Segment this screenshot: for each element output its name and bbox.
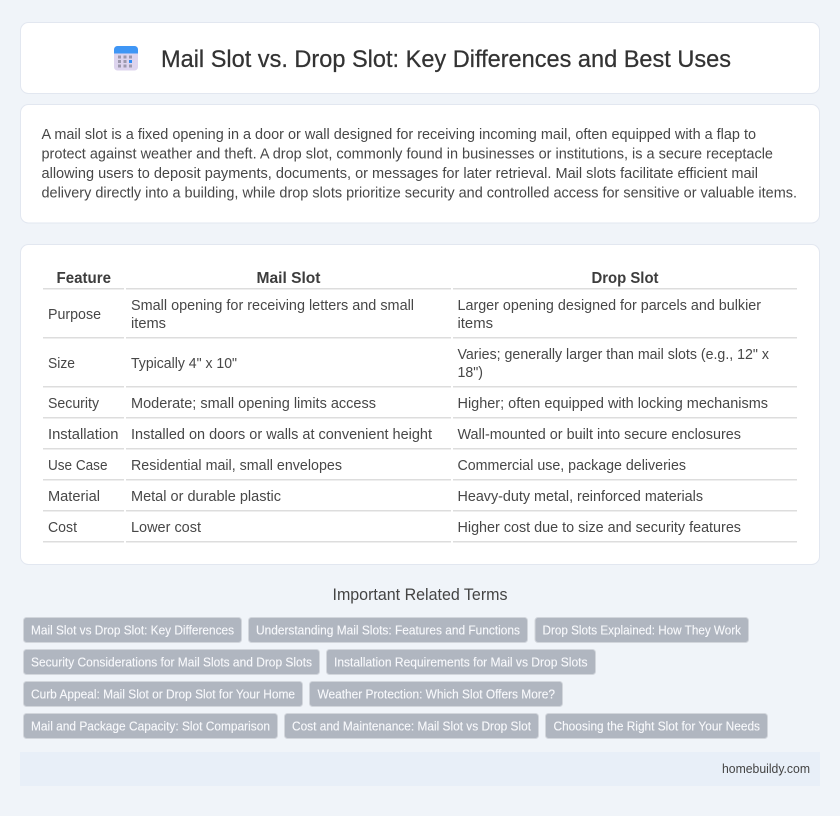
row: Use Case: Use Case	[48, 458, 108, 474]
intro paragraph: protect against weather and theft. A drop slot, commonly found in businesses or institutions, is a secure receptacle	[42, 146, 773, 162]
footer source: homebuildy.com	[722, 762, 810, 776]
tag	[24, 682, 302, 706]
row: Size: Size	[48, 356, 75, 372]
intro paragraph: allowing users to deposit payments, documents, or messages for later retrieval. Mail slots facilitate efficient mail	[42, 166, 758, 182]
row: Cost: Higher cost due to size and security features	[458, 520, 741, 536]
tag	[326, 650, 596, 674]
tag	[24, 650, 320, 674]
icon: calendar	[114, 46, 138, 70]
row: Cost	[43, 520, 797, 542]
tag: Security Considerations for Mail Slots and Drop Slots	[31, 656, 312, 670]
row: Cost: Lower cost	[131, 520, 201, 536]
row: Installation: Wall-mounted or built into secure enclosures	[458, 427, 741, 443]
row: Security: Security	[48, 396, 100, 412]
intro paragraph: delivery directly into a building, while drop slots prioritize security and controlled access for sensitive or valuable items.	[42, 186, 797, 202]
intro paragraph	[42, 127, 797, 202]
row: Installation: Installed on doors or walls at convenient height	[131, 427, 432, 443]
panel: comparison table	[20, 244, 820, 564]
tag: Drop Slots Explained: How They Work	[542, 624, 742, 638]
row: Material: Metal or durable plastic	[131, 489, 282, 505]
row: Security: Higher; often equipped with locking mechanisms	[458, 396, 768, 412]
panel: intro text	[20, 104, 820, 223]
tag: Understanding Mail Slots: Features and Functions	[256, 624, 520, 638]
row: Security	[43, 396, 797, 418]
tag	[310, 682, 562, 706]
tag	[546, 714, 768, 738]
row: Purpose: Small opening for receiving letters and small	[131, 298, 414, 314]
row: Purpose: items	[458, 316, 493, 332]
related term tags	[24, 618, 768, 738]
row: Size: 18")	[458, 365, 483, 381]
title: Mail Slot vs. Drop Slot: Key Differences and Best Uses	[161, 46, 731, 73]
tag	[24, 714, 278, 738]
row: Purpose: items	[131, 316, 166, 332]
table header	[43, 270, 797, 290]
row: Size: Typically 4" x 10"	[131, 356, 237, 372]
heading: Important Related Terms: Important Related Terms	[332, 586, 508, 604]
row: Use Case: Residential mail, small envelopes	[131, 458, 342, 474]
row: Cost: Cost	[48, 520, 77, 536]
row: Installation	[43, 427, 797, 450]
tag: Cost and Maintenance: Mail Slot vs Drop Slot	[292, 720, 531, 734]
tag	[24, 618, 242, 642]
tag: Mail Slot vs Drop Slot: Key Differences	[31, 624, 234, 638]
row: Use Case: Commercial use, package deliveries	[458, 458, 686, 474]
row: Use Case	[43, 458, 797, 480]
tag	[284, 714, 538, 738]
row: Purpose	[43, 298, 797, 338]
tag	[535, 618, 748, 642]
row: Installation: Installation	[48, 427, 118, 443]
footer	[20, 752, 820, 786]
row: Security: Moderate; small opening limits access	[131, 396, 376, 412]
tag: Mail and Package Capacity: Slot Comparison	[31, 720, 270, 734]
row: Purpose: Purpose	[48, 307, 101, 323]
row: Size: Varies; generally larger than mail slots (e.g., 12" x	[458, 347, 770, 363]
tag	[248, 618, 528, 642]
row: Size	[43, 347, 797, 388]
row: Material: Material	[48, 489, 100, 505]
table header: Mail Slot	[256, 270, 320, 287]
row: Purpose: Larger opening designed for parcels and bulkier	[458, 298, 761, 314]
tag: Weather Protection: Which Slot Offers More?	[318, 688, 555, 702]
tag: Installation Requirements for Mail vs Drop Slots	[334, 656, 588, 670]
row: Material: Heavy-duty metal, reinforced materials	[458, 489, 703, 505]
table header: Feature	[56, 270, 111, 287]
row: Material	[43, 489, 797, 512]
tag: Curb Appeal: Mail Slot or Drop Slot for Your Home	[31, 688, 295, 702]
panel: header	[20, 22, 820, 94]
intro paragraph: A mail slot is a fixed opening in a door or wall designed for receiving incoming mail, often equipped with a flap to	[42, 127, 756, 143]
tag: Choosing the Right Slot for Your Needs	[554, 720, 760, 734]
table header: Drop Slot	[592, 270, 658, 287]
